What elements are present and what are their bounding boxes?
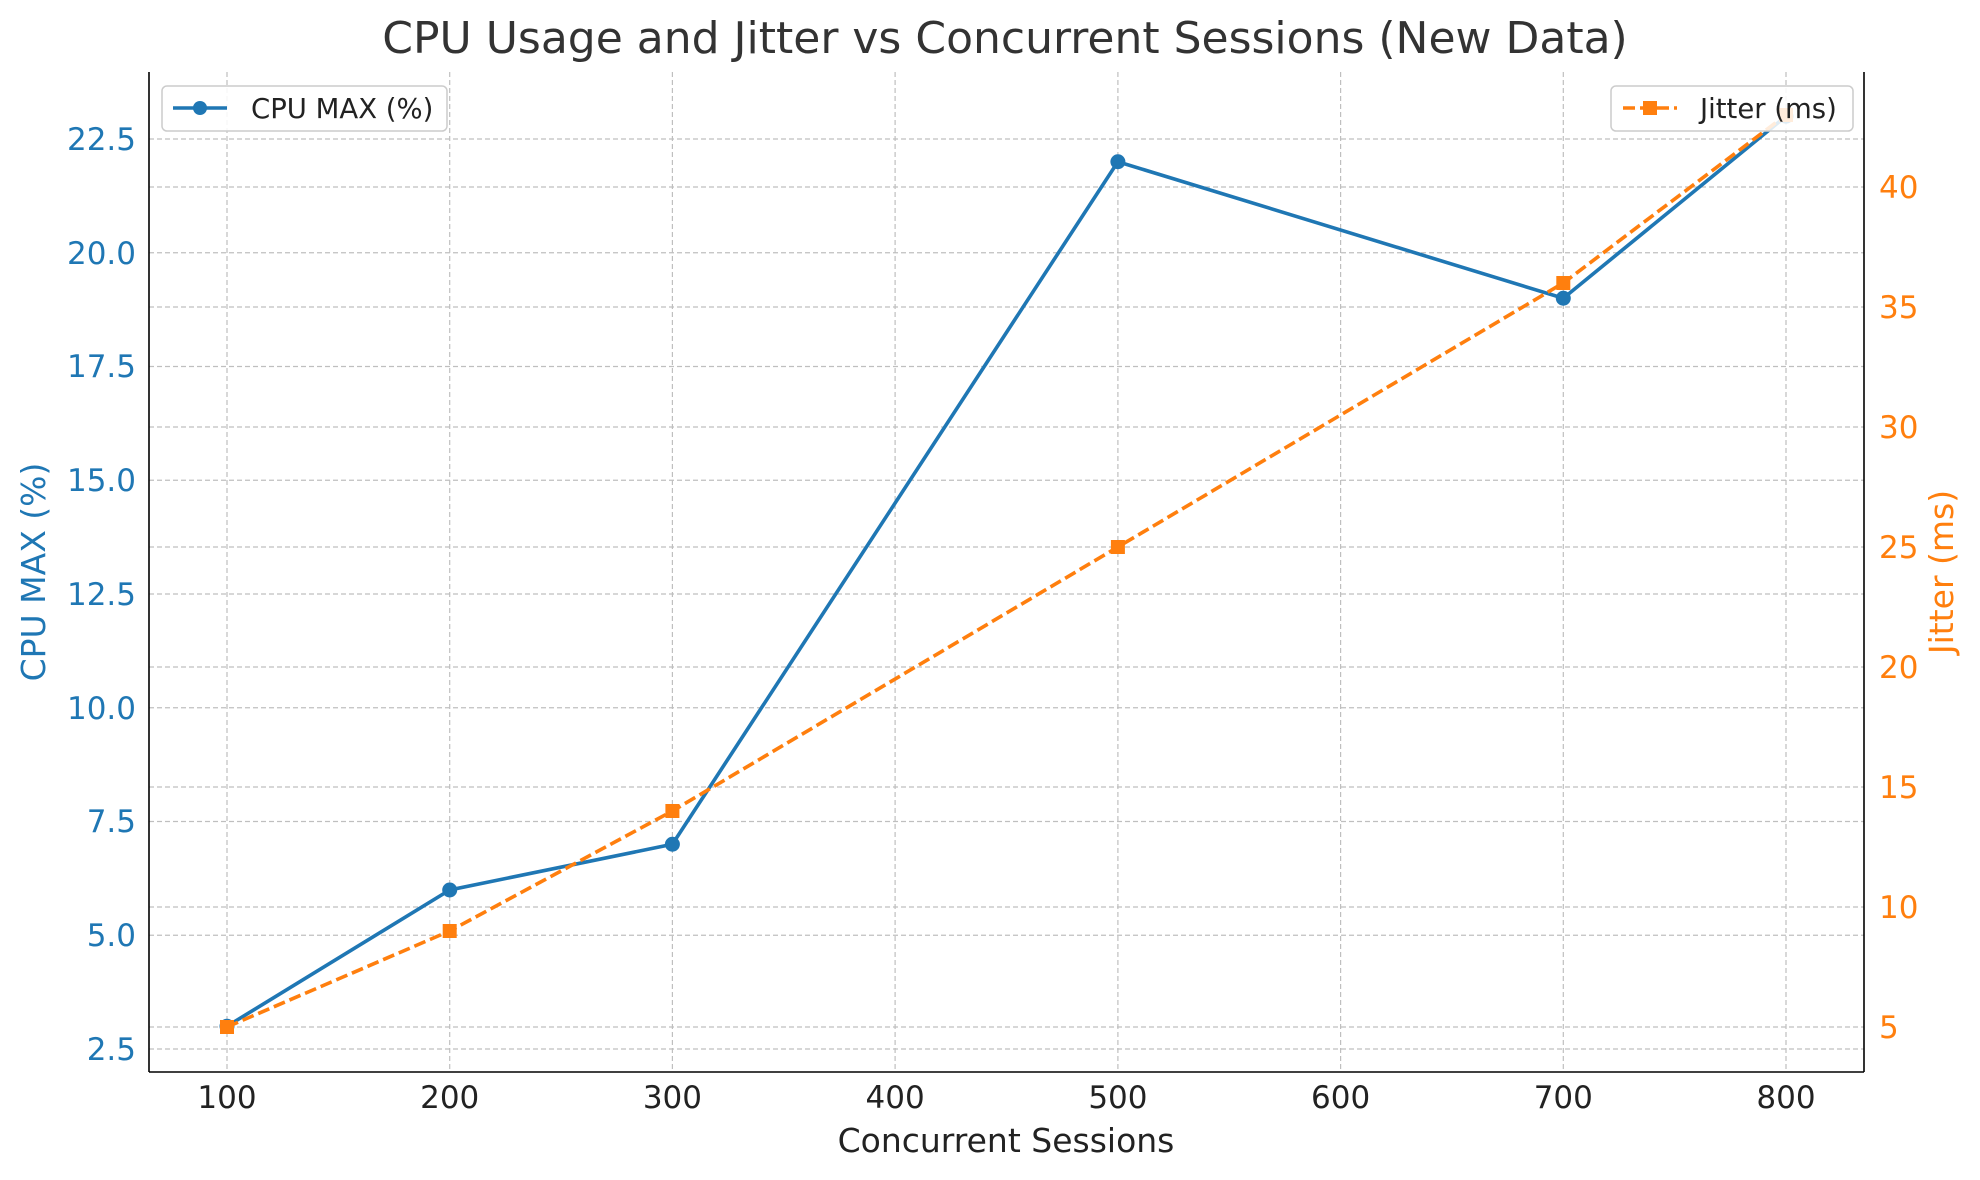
x axis ticks: 200 (420, 1080, 479, 1116)
right axis ticks (1879, 170, 1918, 1046)
left axis ticks (67, 122, 136, 1068)
left axis ticks: 2.5 (87, 1032, 136, 1068)
left axis ticks: 10.0 (67, 691, 136, 727)
left axis ticks: 20.0 (67, 236, 136, 272)
CPU line (220, 109, 1794, 1034)
left axis label: CPU MAX (%) (14, 463, 53, 681)
left axis ticks: 5.0 (87, 918, 136, 954)
left axis ticks: 7.5 (87, 804, 136, 840)
Jitter line (220, 108, 1793, 1034)
x axis ticks: 800 (1756, 1080, 1816, 1116)
right axis label: Jitter (ms) (1922, 490, 1961, 656)
right axis ticks: 5 (1879, 1010, 1899, 1046)
right axis ticks: 30 (1879, 410, 1918, 446)
right axis ticks: 10 (1879, 890, 1918, 926)
title: CPU Usage and Jitter vs Concurrent Sessions (New Data) (382, 13, 1628, 64)
x axis ticks (197, 1080, 1816, 1116)
right axis ticks: 35 (1879, 290, 1918, 326)
right axis ticks: 15 (1879, 770, 1918, 806)
legend: CPU: CPU MAX (%) (251, 93, 433, 125)
left axis ticks: 12.5 (67, 577, 136, 613)
x axis ticks: 400 (866, 1080, 925, 1116)
legend: Jitter: Jitter (ms) (1698, 93, 1837, 125)
x axis ticks: 700 (1534, 1080, 1593, 1116)
legend: CPU (162, 86, 447, 131)
left axis ticks: 22.5 (67, 122, 136, 158)
right axis ticks: 25 (1879, 530, 1918, 566)
axes frame (149, 72, 1864, 1072)
left axis ticks: 15.0 (67, 463, 136, 499)
legend: Jitter (1611, 86, 1853, 131)
x axis ticks: 100 (197, 1080, 257, 1116)
x axis label: Concurrent Sessions (838, 1121, 1174, 1160)
right axis ticks: 40 (1879, 170, 1918, 206)
x axis ticks: 300 (643, 1080, 702, 1116)
left axis ticks: 17.5 (67, 349, 136, 385)
right axis ticks: 20 (1879, 650, 1918, 686)
x axis ticks: 500 (1088, 1080, 1147, 1116)
x axis ticks: 600 (1311, 1080, 1370, 1116)
